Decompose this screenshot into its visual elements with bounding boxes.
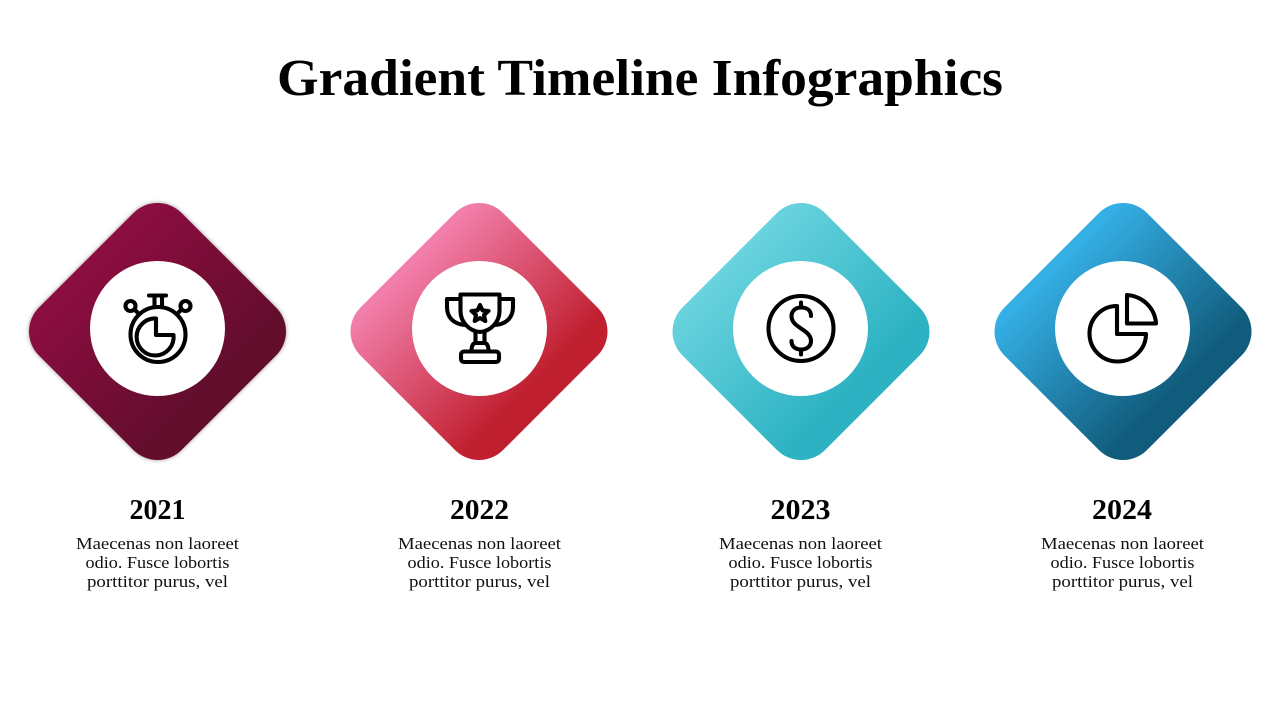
- icon: trophy: [447, 294, 513, 362]
- description: 2024: [1041, 534, 1204, 591]
- diamond: 2023: [673, 203, 929, 460]
- icon: dollar coin: [768, 296, 834, 361]
- panel: 2021: [29, 203, 286, 591]
- description: 2021: porttitor purus, vel: [87, 572, 228, 591]
- description: 2023: odio. Fusce lobortis: [728, 553, 872, 572]
- description: 2024: porttitor purus, vel: [1052, 572, 1193, 591]
- icon: stopwatch: [126, 296, 190, 362]
- description: 2022: [398, 534, 561, 591]
- panel: 2022: [351, 203, 607, 591]
- description: 2022: odio. Fusce lobortis: [408, 553, 552, 572]
- panel: 2024: [995, 203, 1251, 591]
- year: 2024: 2024: [1092, 495, 1152, 526]
- icon: pie chart: [1090, 295, 1156, 362]
- icon circle: 2023: [733, 261, 868, 396]
- description: 2021: Maecenas non laoreet: [76, 534, 239, 553]
- diamond: 2022: [351, 203, 607, 460]
- description: 2023: porttitor purus, vel: [730, 572, 871, 591]
- description: 2021: odio. Fusce lobortis: [86, 553, 230, 572]
- description: 2024: Maecenas non laoreet: [1041, 534, 1204, 553]
- year: 2021: 2021: [130, 495, 186, 526]
- description: 2023: [719, 534, 882, 591]
- year: 2023: 2023: [770, 495, 830, 526]
- title: Gradient Timeline Infographics: [277, 50, 1003, 107]
- description: 2024: odio. Fusce lobortis: [1050, 553, 1194, 572]
- icon circle: 2021: [90, 261, 225, 396]
- description: 2022: Maecenas non laoreet: [398, 534, 561, 553]
- description: 2022: porttitor purus, vel: [409, 572, 550, 591]
- diamond: 2021: [29, 203, 286, 460]
- panel: 2023: [673, 203, 929, 591]
- icon circle: 2022: [412, 261, 547, 396]
- description: 2023: Maecenas non laoreet: [719, 534, 882, 553]
- icon circle: 2024: [1055, 261, 1190, 396]
- year: 2022: 2022: [450, 495, 509, 526]
- description: 2021: [76, 534, 239, 591]
- diamond: 2024: [995, 203, 1251, 460]
